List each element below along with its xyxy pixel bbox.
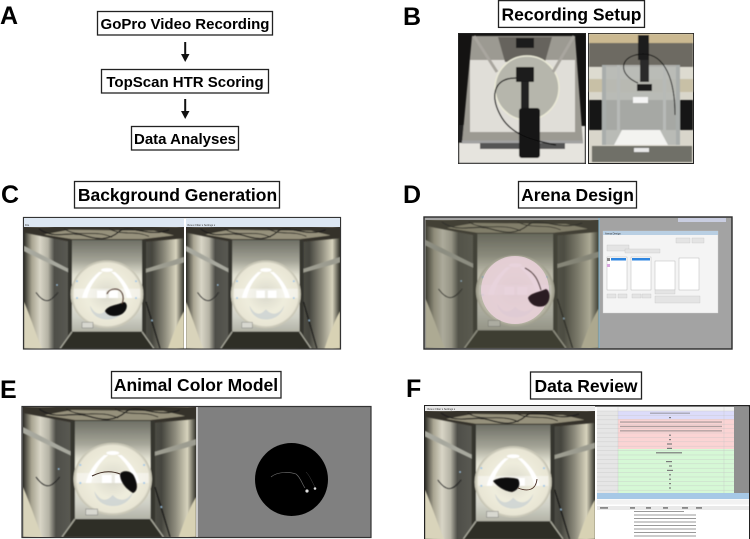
photo: top view of camera over arena [458,34,586,164]
dialog buttons [607,238,704,303]
toolbar icons [678,218,726,222]
mouse in zone [525,268,550,307]
video frame with mouse [24,227,184,348]
dialog: arena settings: Arena Design [605,231,621,235]
panel letter B: B [403,3,421,31]
panel letter D: D [403,181,421,209]
video frame with zone overlay [426,220,598,348]
window toolbar right [186,218,340,227]
screenshot pair: frame and color model [22,406,371,538]
step: GoPro Video Recording [98,12,272,35]
dialog lists [607,257,699,290]
mouse tail [518,479,537,490]
panel F: data review [406,372,750,539]
panel E: animal color model [0,372,371,538]
window toolbar right: View ▾ Filter ▾ Settings ▾ [187,223,216,227]
screenshot pair: frame with and without mouse [24,218,340,349]
panel C: background generation [1,181,340,349]
dialog: arena settings [603,231,718,313]
window toolbar left: File [25,223,30,227]
heading: Recording Setup: Recording Setup [501,4,642,24]
screenshot: data review window [424,405,750,539]
mouse tail [92,472,120,476]
panel D: arena design [403,181,732,349]
mouse in arena [105,289,127,316]
mouse in arena [493,478,519,492]
window toolbar left [24,218,184,227]
arrow: step 1 to step 2 [181,42,190,62]
step: TopScan HTR Scoring: TopScan HTR Scoring [106,74,264,91]
panel A: workflow [0,2,272,150]
results window [597,493,749,539]
panel letter E: E [0,376,17,404]
heading: Data Review [530,372,642,399]
arrow: step 2 to step 3 [181,99,190,119]
color model: black arena disc with mouse highlights [255,443,328,516]
toolbar [425,406,595,411]
video frame with mouse [425,411,595,539]
heading: Animal Color Model: Animal Color Model [114,375,278,395]
panel letter C: C [1,181,19,209]
background frame without mouse [186,227,340,348]
heading: Arena Design: Arena Design [521,185,634,205]
video frame with mouse [23,407,196,537]
mouse in arena [120,471,137,493]
divider between frames [196,407,198,537]
step: TopScan HTR Scoring [102,70,268,93]
photo: side view of camera over arena [588,34,694,164]
heading: Data Review: Data Review [534,376,638,396]
panel letter A: A [0,2,18,30]
screenshot: arena design window [424,217,732,349]
heading: Background Generation: Background Generation [78,185,277,205]
divider between frame and dialog [598,218,600,348]
pink arena zone [481,256,549,324]
step: GoPro Video Recording: GoPro Video Recording [101,16,269,33]
panel B: recording setup [403,1,694,163]
step: Data Analyses: Data Analyses [134,131,236,148]
toolbar: View ▾ Filter ▾ Settings ▾ [427,407,456,411]
panel letter F: F [406,375,421,403]
attribute table [597,407,749,493]
step: Data Analyses [132,126,238,150]
